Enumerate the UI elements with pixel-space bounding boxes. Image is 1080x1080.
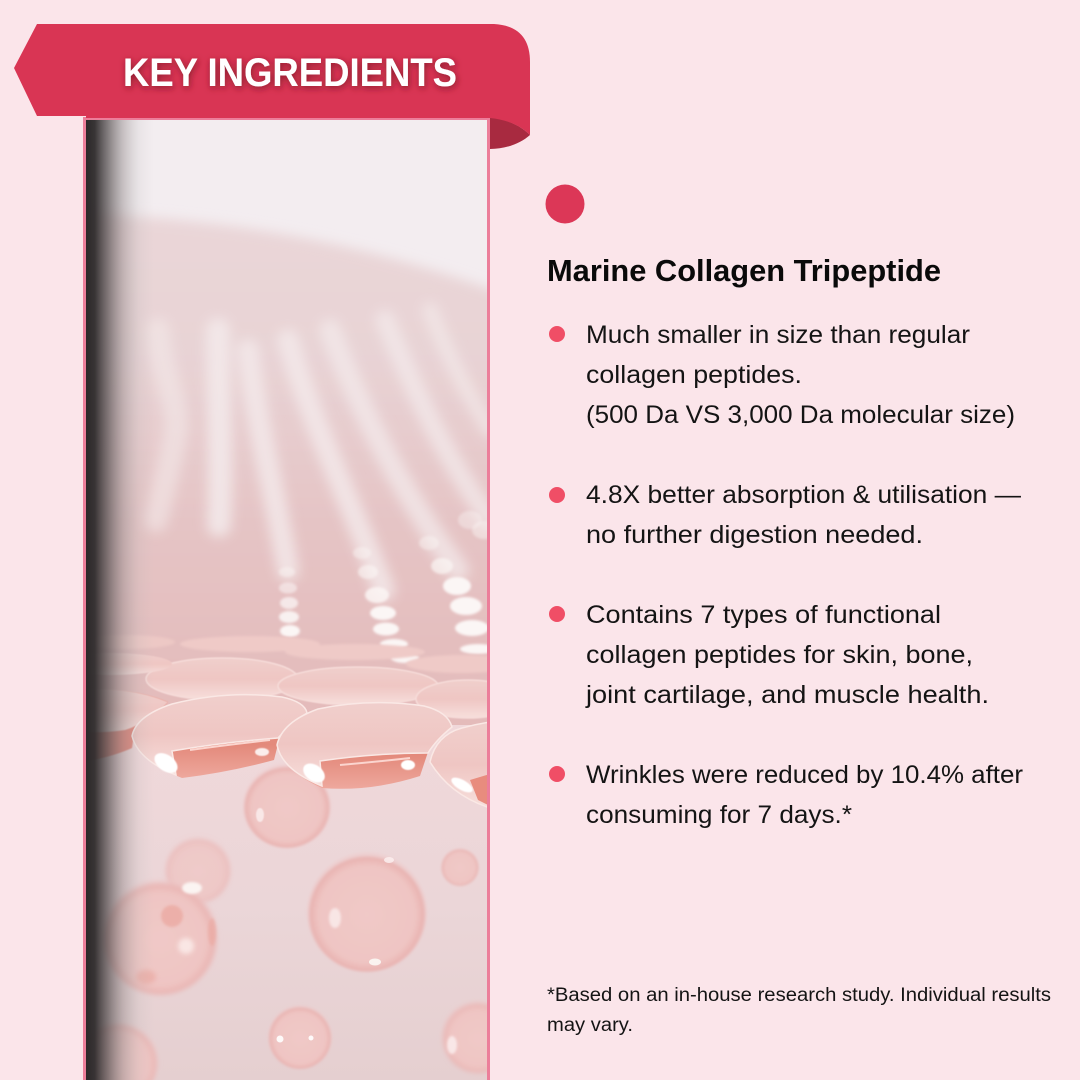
far row of molecules: [136, 636, 487, 672]
benefit 1: [549, 321, 1015, 429]
bullet 1: [549, 326, 565, 342]
benefit 2: [549, 481, 1021, 549]
light streaks: [156, 310, 490, 590]
dark shaded left edge: [86, 120, 142, 1080]
benefit 2 text: no further digestion needed.: [586, 521, 923, 549]
benefit 3 text: joint cartilage, and muscle health.: [585, 681, 989, 709]
bullet 2: [549, 487, 565, 503]
banner title: KEY INGREDIENTS: [123, 51, 457, 95]
ingredient heading: Marine Collagen Tripeptide: [547, 253, 941, 288]
benefit 2 text: 4.8X better absorption & utilisation —: [586, 481, 1021, 509]
benefit 1 text: collagen peptides.: [586, 361, 802, 389]
front row of hexagonal molecules: [132, 695, 490, 808]
footnote: may vary.: [547, 1015, 633, 1036]
left partial molecule: [98, 692, 168, 758]
bullet 3: [549, 606, 565, 622]
benefit 4 text: Wrinkles were reduced by 10.4% after: [586, 761, 1023, 789]
bubbles: [108, 765, 487, 1080]
benefit 3 text: Contains 7 types of functional: [586, 601, 941, 629]
back row of hexagonal molecules: [98, 654, 487, 758]
accent dot: [546, 184, 584, 224]
benefit 4 text: consuming for 7 days.*: [586, 801, 852, 829]
benefit 1 text: (500 Da VS 3,000 Da molecular size): [586, 401, 1015, 429]
footnote: *Based on an in-house research study. Individual results: [547, 985, 1051, 1006]
pearl dots along streaks: [279, 511, 496, 663]
photo panel: collagen molecule render: [83, 117, 490, 1080]
ribbon body: [14, 24, 530, 135]
benefit 1 text: Much smaller in size than regular: [586, 321, 970, 349]
photo frame: [84, 118, 488, 1080]
benefit 3 text: collagen peptides for skin, bone,: [586, 641, 973, 669]
ribbon fold: [490, 117, 530, 149]
photo scene: [86, 120, 487, 1080]
ribbon banner: [14, 24, 530, 149]
benefit 4: [549, 761, 1023, 829]
bullet 4: [549, 766, 565, 782]
benefit 3: [549, 601, 989, 709]
